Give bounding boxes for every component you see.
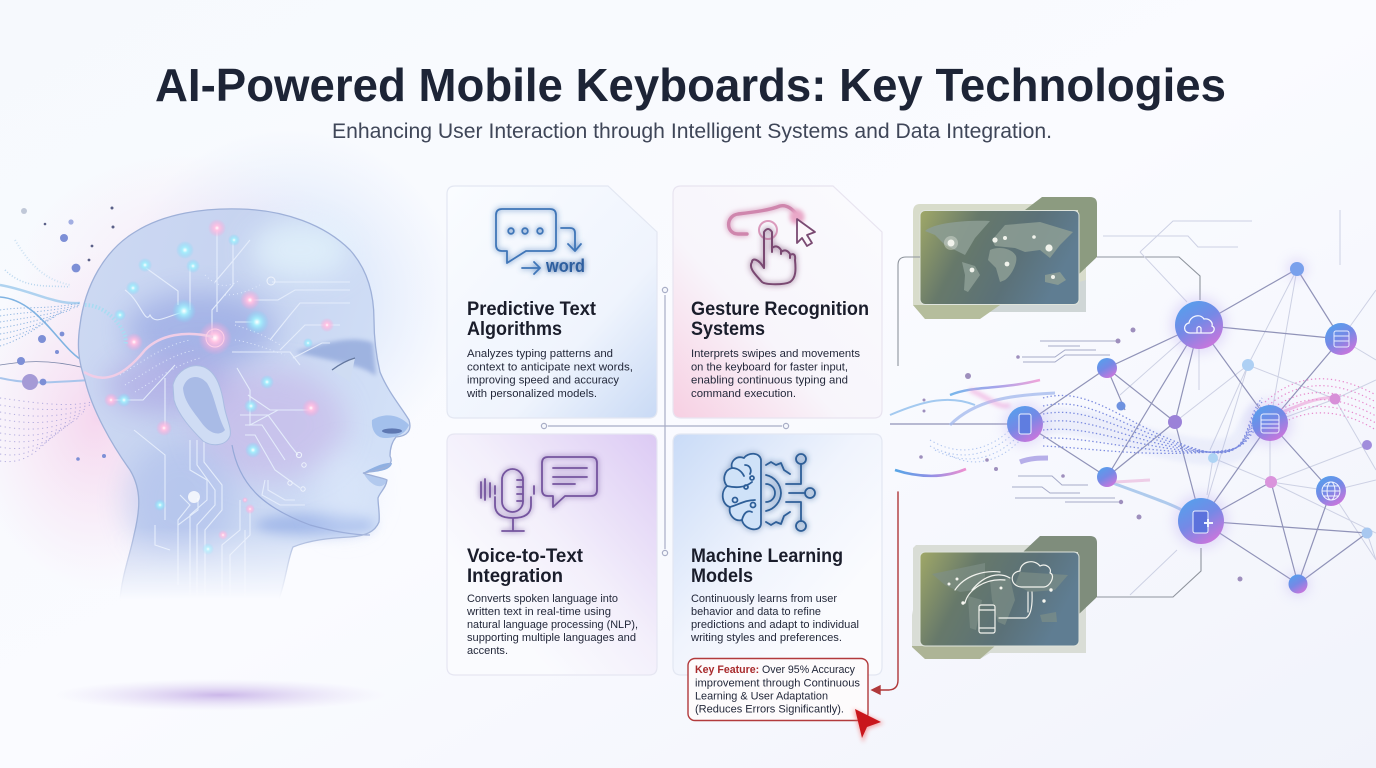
world map [925,221,1073,292]
node: cloud [1175,301,1223,349]
dim world map [932,563,1068,630]
callout: key feature: Learning & User Adaptation [695,690,828,702]
node: server centre [1252,405,1288,441]
synapse line [84,334,213,378]
panel: gesture recognition: command execution. [691,388,796,400]
description: Analyzes typing patterns and [467,348,613,360]
nose shadow [372,415,409,438]
panel: machine learning: Models [691,566,753,587]
callout: key feature [688,658,868,720]
panel: gesture recognition: Systems [691,319,765,340]
heading: Gesture Recognition [691,299,869,320]
cloud and phone icons [955,562,1052,633]
heading: Voice-to-Text [467,546,584,567]
panel: predictive text: Algorithms [467,319,562,340]
panel: predictive text [447,186,657,418]
panel: voice to text: natural language processing (NLP), [467,619,638,631]
data wave mesh [890,379,1376,512]
panel: machine learning: predictions and adapt to individual [691,619,859,631]
illustration: AI head [0,173,422,708]
panel: voice to text: accents. [467,645,508,657]
map panel: cloud and phone [912,536,1097,659]
panel: machine learning: writing styles and preferences. [690,632,842,644]
lips [363,463,392,473]
title: AI-Powered Mobile Keyboards: Key Technologies [155,59,1226,111]
subtitle: Enhancing User Interaction through Intelligent Systems and Data Integration. [332,120,1052,143]
jaw line [232,445,370,535]
panel: machine learning: behavior and data to refine [691,606,821,618]
panel: voice to text: supporting multiple languages and [467,632,636,644]
callout: key feature: Key Feature: Over 95% Accuracy [695,664,855,676]
head outline [78,209,410,615]
head silhouette [78,209,410,615]
description: Interprets swipes and movements [691,348,860,360]
network nodes [1097,262,1372,594]
panel: voice to text: Integration [467,566,563,587]
icon: brain and circuit [723,454,815,531]
network diagram [890,210,1376,596]
node: phone with plus [1178,498,1224,544]
panel: machine learning [673,434,882,675]
panel: predictive text: with personalized models. [466,388,597,400]
icon: speech bubble to word: word [545,256,585,276]
decorative faint network lines [1103,210,1376,595]
node halos [1004,259,1310,596]
panel: voice to text: written text in real-time using [466,606,611,618]
node: phone [1007,406,1043,442]
callout: key feature: improvement through Continuous [695,678,860,690]
panel: gesture recognition [673,186,882,418]
connector lines to maps [898,257,1201,597]
circuit traces [112,229,350,605]
map panel: global data [913,197,1097,319]
left data streams [0,240,92,462]
description: Converts spoken language into [467,593,618,605]
panel: gesture recognition: enabling continuous typing and [691,374,848,386]
node: globe [1316,476,1346,506]
node: server right [1325,323,1357,355]
panel: predictive text: improving speed and accuracy [467,374,619,386]
floor shadow [55,679,385,711]
main edges [890,269,1367,584]
ear [173,366,230,445]
eye socket [295,340,376,376]
glowing points [104,219,334,555]
arrow: to key feature [872,492,898,694]
icon: swipe hand and cursor [729,206,815,284]
heading: Predictive Text [467,299,597,320]
card connector lines [541,287,789,556]
icon: microphone and speech bubble [481,457,597,531]
icon: red cursor [853,709,884,743]
panel: gesture recognition: on the keyboard for faster input, [691,362,848,374]
callout: key feature: (Reduces Errors Significantly). [695,704,844,716]
brain shading [125,292,275,368]
brain speckle [120,275,285,392]
heading: Machine Learning [691,546,843,567]
panel: voice to text [447,434,657,675]
icon: speech bubble to word [496,209,585,276]
panel: predictive text: context to anticipate next words, [467,362,633,374]
description: Continuously learns from user [691,593,837,605]
small circuit traces [1012,341,1120,502]
